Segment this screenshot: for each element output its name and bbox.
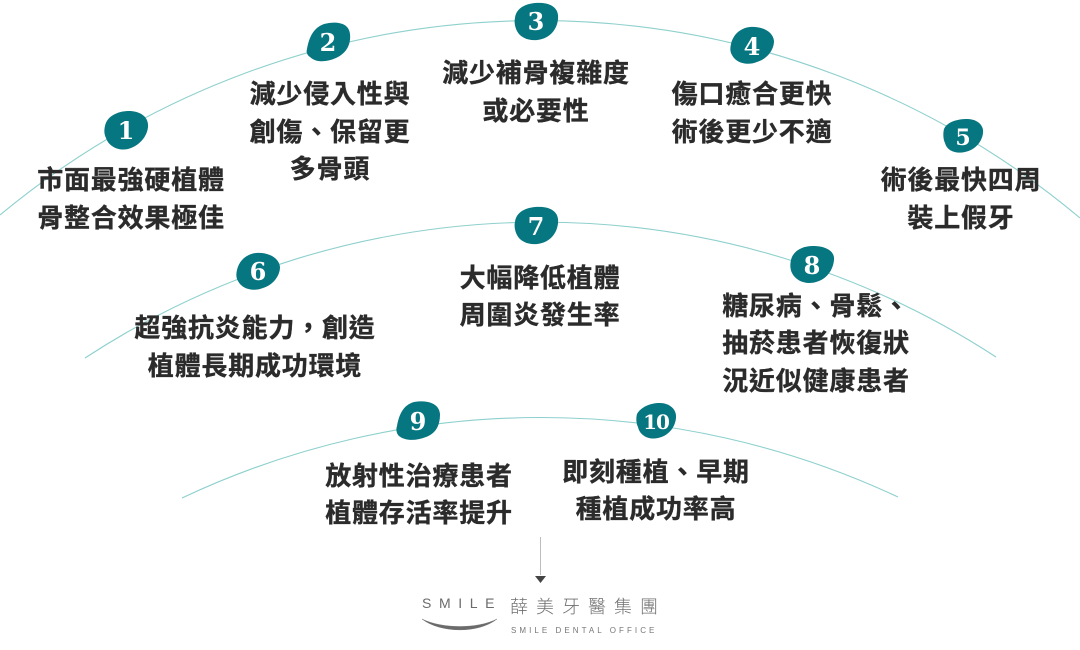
logo xyxy=(422,595,666,635)
arc: middle row xyxy=(85,222,996,358)
badge 9: 9 xyxy=(410,407,426,436)
badge 6: 6 xyxy=(250,257,266,286)
badge 10: 10 xyxy=(643,410,669,434)
badge 1 xyxy=(104,111,148,150)
text 6: 超強抗炎能力，創造 xyxy=(134,313,376,343)
badge 7: 7 xyxy=(528,212,544,241)
item 8 xyxy=(722,246,910,396)
badge 5 xyxy=(943,119,983,153)
text 5: 裝上假牙 xyxy=(907,203,1015,233)
text 1: 骨整合效果極佳 xyxy=(37,203,225,233)
text 2: 創傷、保留更 xyxy=(250,117,410,147)
text 8: 糖尿病、骨鬆、 xyxy=(722,291,910,321)
item 1 xyxy=(37,111,225,233)
text 5: 術後最快四周 xyxy=(881,165,1041,195)
text 8: 抽菸患者恢復狀 xyxy=(722,328,910,358)
badge 2 xyxy=(307,23,350,61)
badge 4: 4 xyxy=(744,32,760,61)
badge 8: 8 xyxy=(804,251,820,280)
item 5 xyxy=(881,119,1041,233)
text 1: 市面最強硬植體 xyxy=(37,165,225,195)
badge 5: 5 xyxy=(955,125,971,151)
text 10: 種植成功率高 xyxy=(576,494,736,524)
text 10: 即刻種植、早期 xyxy=(562,457,750,487)
text 4: 術後更少不適 xyxy=(672,117,832,147)
item 2 xyxy=(250,23,410,184)
item 4 xyxy=(672,27,832,147)
logo: chinese name: 薛美牙醫集團 xyxy=(510,597,666,617)
text 9: 放射性治療患者 xyxy=(325,461,513,491)
badge 2: 2 xyxy=(320,28,336,57)
badge 1: 1 xyxy=(118,116,134,145)
badge 9 xyxy=(396,401,440,440)
text 7: 周圍炎發生率 xyxy=(460,300,620,330)
arc: bottom row xyxy=(182,417,898,498)
text 3: 減少補骨複雜度 xyxy=(442,58,630,88)
badge 4 xyxy=(730,27,774,64)
item 10 xyxy=(562,403,750,524)
logo: SMILE wordmark: SMILE xyxy=(422,595,502,611)
item 7 xyxy=(460,207,620,330)
text 2: 多骨頭 xyxy=(290,154,370,184)
text 6: 植體長期成功環境 xyxy=(148,351,362,381)
badge 7 xyxy=(515,207,558,244)
item 3 xyxy=(442,3,630,126)
badge 3: 3 xyxy=(528,7,544,36)
badge 3 xyxy=(515,3,558,40)
logo: english tagline: SMILE DENTAL OFFICE xyxy=(511,626,657,635)
badge 6 xyxy=(236,253,280,290)
badge 8 xyxy=(790,246,834,283)
arc: top row xyxy=(0,21,1080,218)
text 9: 植體存活率提升 xyxy=(325,498,513,528)
badge 10 xyxy=(636,403,676,439)
text 3: 或必要性 xyxy=(482,96,590,126)
text 7: 大幅降低植體 xyxy=(460,263,620,293)
text 8: 況近似健康患者 xyxy=(722,366,910,396)
text 4: 傷口癒合更快 xyxy=(672,79,832,109)
text 2: 減少侵入性與 xyxy=(250,79,410,109)
item 9 xyxy=(325,401,513,528)
logo: smile curve xyxy=(422,619,497,630)
item 6 xyxy=(134,253,376,381)
arrow down to logo xyxy=(535,537,546,583)
